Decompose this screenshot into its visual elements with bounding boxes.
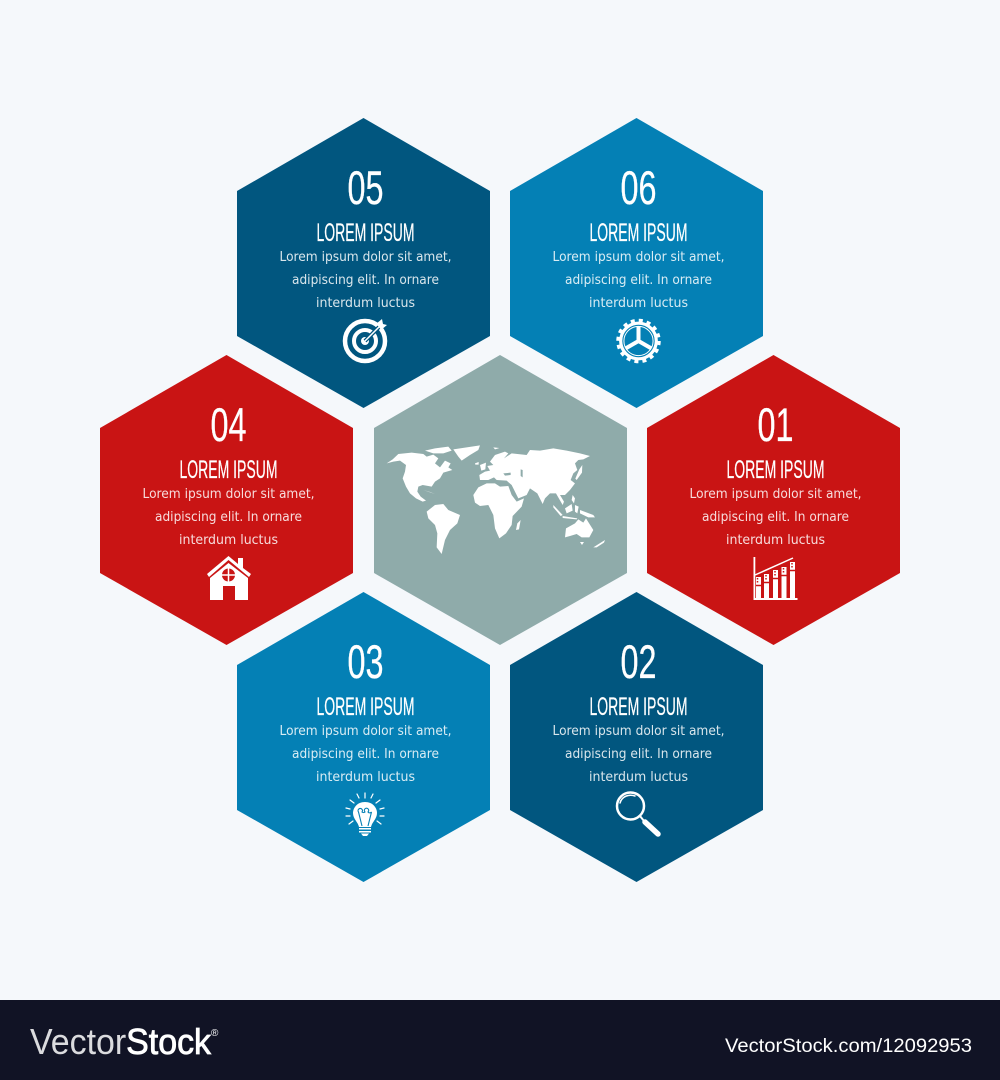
registered mark: ®: [211, 1028, 219, 1039]
text block 02: adipiscing elit. In ornare: [565, 747, 712, 762]
text block 01: interdum luctus: [726, 533, 825, 548]
text block 06: adipiscing elit. In ornare: [565, 273, 712, 288]
icon: bar chart: [754, 557, 798, 600]
text block 03: [280, 724, 452, 785]
number 06: 06: [620, 161, 656, 214]
heading 06: LOREM IPSUM: [590, 219, 688, 247]
icon: magnifier: [617, 792, 658, 834]
text block 05: adipiscing elit. In ornare: [292, 273, 439, 288]
text block 06: interdum luctus: [589, 296, 688, 311]
footer logo: VectorStock: [30, 1021, 212, 1062]
icon: gear: [618, 320, 659, 362]
icon: target: [345, 319, 387, 361]
text block 05: [280, 250, 452, 311]
text block 06: Lorem ipsum dolor sit amet,: [552, 250, 724, 265]
text block 02: [552, 724, 724, 785]
text block 05: interdum luctus: [316, 296, 415, 311]
text block 01: Lorem ipsum dolor sit amet,: [690, 487, 862, 502]
text block 04: Lorem ipsum dolor sit amet,: [142, 487, 314, 502]
panel: hexagon 02: [510, 592, 763, 882]
text block 01: [690, 487, 862, 548]
icon: house: [207, 556, 251, 600]
text block 03: adipiscing elit. In ornare: [292, 747, 439, 762]
footer bar: [0, 1000, 1000, 1080]
heading 02: LOREM IPSUM: [590, 693, 688, 721]
text block 01: adipiscing elit. In ornare: [702, 510, 849, 525]
number 03: 03: [348, 635, 384, 688]
panel: hexagon 05: [237, 118, 490, 408]
text block 04: adipiscing elit. In ornare: [155, 510, 302, 525]
number 02: 02: [620, 635, 656, 688]
number 04: 04: [210, 398, 246, 451]
text block 03: Lorem ipsum dolor sit amet,: [280, 724, 452, 739]
number 05: 05: [348, 161, 384, 214]
text block 03: interdum luctus: [316, 770, 415, 785]
heading 05: LOREM IPSUM: [316, 219, 414, 247]
icon: light bulb: [346, 793, 384, 836]
panel: hexagon 03: [237, 592, 490, 882]
panel: hexagon 06: [510, 118, 763, 408]
panel: hexagon 04: [100, 355, 353, 645]
heading 04: LOREM IPSUM: [180, 456, 278, 484]
panel: hexagon 01: [647, 355, 900, 645]
panel: hexagon centre with world map: [374, 355, 627, 645]
footer url: VectorStock.com/12092953: [725, 1036, 972, 1057]
text block 05: Lorem ipsum dolor sit amet,: [280, 250, 452, 265]
text block 02: interdum luctus: [589, 770, 688, 785]
heading 03: LOREM IPSUM: [316, 693, 414, 721]
number 01: 01: [758, 398, 794, 451]
text block 04: [142, 487, 314, 548]
text block 06: [552, 250, 724, 311]
text block 04: interdum luctus: [179, 533, 278, 548]
text block 02: Lorem ipsum dolor sit amet,: [552, 724, 724, 739]
world map: [387, 445, 605, 554]
heading 01: LOREM IPSUM: [726, 456, 824, 484]
